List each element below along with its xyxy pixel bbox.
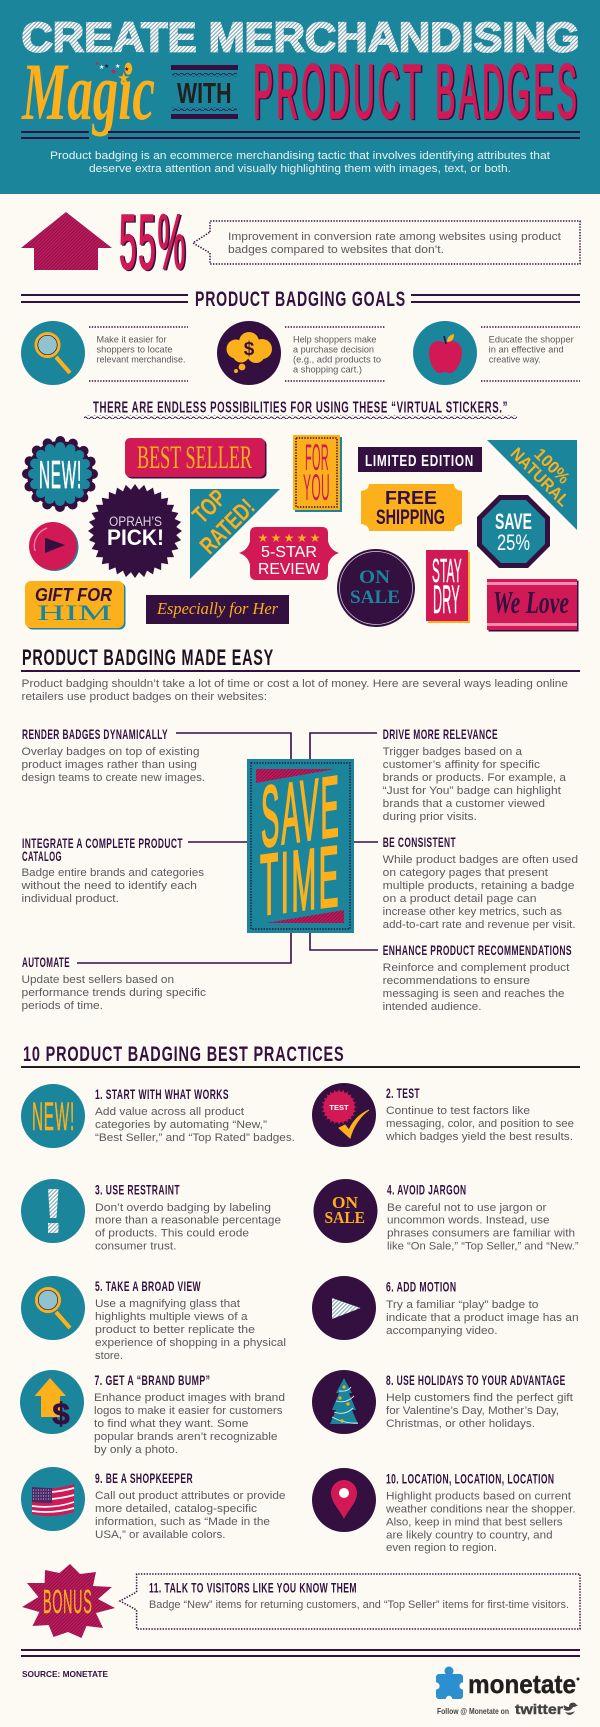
practice 8 — [312, 1370, 573, 1434]
title line 1: CREATE MERCHANDISING — [22, 14, 580, 60]
panel: 55% statistic: 55% — [120, 198, 188, 286]
icon: bonus starburst — [22, 1564, 115, 1638]
practice 1: “Best Seller,” and “Top Rated” badges. — [95, 1132, 295, 1144]
icon: exclamation — [21, 1179, 85, 1243]
item: integrate a complete product catalog — [20, 835, 205, 905]
icon: stars above Magic: ★ — [104, 63, 109, 70]
badge: BEST SELLER: BEST SELLER — [137, 440, 252, 476]
practice 3: more than a reasonable percentage — [95, 1214, 281, 1226]
practice 6: 6. ADD MOTION — [386, 1278, 456, 1294]
callout text — [228, 231, 561, 256]
badge: FREE SHIPPING — [361, 484, 462, 531]
badge: play — [29, 522, 78, 571]
goal 3 text: creative way. — [489, 354, 541, 364]
item: enhance product recommendations — [383, 942, 572, 1013]
practice 10: are likely country to country, and — [386, 1530, 553, 1542]
item: enhance product recommendations: recommendations to ensure — [383, 975, 530, 987]
badge: ON SALE: ON — [359, 567, 390, 588]
badge: FREE SHIPPING: FREE — [385, 487, 437, 508]
badge: Oprah's Pick: PICK! — [107, 525, 164, 550]
item: render badges dynamically: Overlay badges on top of existing — [22, 746, 200, 758]
practice 4: like “On Sale,” “Top Seller,” and “New.” — [387, 1240, 579, 1252]
panel: best practices — [20, 1043, 580, 1554]
practice 10 — [312, 1468, 576, 1554]
practice 3: consumer trust. — [95, 1240, 176, 1252]
bonus text: 11. TALK TO VISITORS LIKE YOU KNOW THEM — [149, 1580, 357, 1596]
icon: location pin — [312, 1468, 376, 1532]
monetate logo — [432, 1666, 580, 1717]
practice 8: for Valentine’s Day, Mother’s Day, — [386, 1405, 559, 1417]
practice 1: Add value across all product — [95, 1106, 244, 1118]
big number — [119, 198, 188, 286]
icon: play — [312, 1276, 376, 1340]
icon: ON SALE: ON — [332, 1193, 358, 1212]
practice 5: highlights multiple views of a — [95, 1311, 248, 1323]
badge: We Love — [487, 579, 578, 632]
practice 5: experience of shopping in a physical — [95, 1337, 286, 1349]
practice 9: USA,” or available colors. — [95, 1529, 226, 1541]
practice 3: 3. USE RESTRAINT — [95, 1182, 180, 1198]
practice 4: phrases consumers are familiar with — [387, 1228, 575, 1240]
practice 10: Also, keep in mind that best sellers — [386, 1516, 563, 1528]
intro text: Product badging is an ecommerce merchandising tactic that involves identifying attributes that — [50, 150, 550, 162]
practice 7: 7. GET A “BRAND BUMP” — [94, 1372, 210, 1388]
bonus text: Badge “New” items for returning customers, and “Top Seller” items for first-time visitors. — [149, 1599, 569, 1611]
panel: sticker badges: FOR — [305, 437, 329, 478]
icon: flag — [21, 1467, 85, 1531]
panel: product badging goals — [21, 288, 580, 419]
badge: 5-star review: ★ — [258, 531, 268, 545]
icon: thought cloud: $ — [244, 339, 255, 360]
panel: product badging made easy: SAVE — [261, 758, 341, 866]
title word: Magic: Magic — [21, 46, 155, 137]
practice 6: Try a familiar “play” badge to — [386, 1299, 538, 1311]
badge: BEST SELLER — [125, 438, 266, 478]
item: drive more relevance: DRIVE MORE RELEVANCE — [383, 726, 498, 742]
badge: GIFT FOR HIM: HIM — [37, 600, 112, 625]
badge: Especially for Her: Especially for Her — [156, 599, 278, 618]
practice 6: indicate that a product image has an — [386, 1312, 579, 1324]
practice 7 — [20, 1370, 285, 1456]
practice 7: to find what they want. Some — [94, 1418, 248, 1430]
goal 2 — [217, 321, 385, 385]
badge: NEW! — [27, 441, 93, 507]
item: render badges dynamically: product images rather than using — [22, 759, 197, 771]
icon: up arrow with dollar — [20, 1370, 84, 1434]
icon: magnifying glass — [21, 321, 85, 385]
badge: 5-star review — [239, 527, 339, 580]
item: automate: AUTOMATE — [22, 954, 70, 970]
practice 3: of products. This could erode — [95, 1228, 249, 1240]
heading: 10 PRODUCT BADGING BEST PRACTICES — [23, 1043, 344, 1066]
practice 7: popular brands aren’t recognizable — [94, 1431, 278, 1443]
WITH emblem: WITH — [177, 78, 232, 110]
item: drive more relevance: customer’s affinity for specific — [383, 759, 541, 771]
goal 2 text: Help shoppers make — [293, 334, 376, 344]
intro paragraph: Product badging shouldn’t take a lot of time or cost a lot of money. Here are several ways leading online — [22, 678, 568, 690]
badge: FOR YOU — [293, 435, 342, 512]
goal 2 text: (e.g., add products to — [293, 354, 381, 364]
badge: 5-star review: ★ — [310, 531, 320, 545]
heading rules — [21, 295, 580, 302]
item: integrate a complete product catalog: individual product. — [22, 893, 119, 905]
icon: stars above Magic: ★ — [117, 70, 130, 87]
panel: header — [0, 0, 600, 194]
follow line: Follow @ Monetate on — [437, 1706, 509, 1716]
practice 1: categories by automating “New,” — [95, 1119, 267, 1131]
goal 2 text — [293, 334, 381, 374]
heading: PRODUCT BADGING GOALS — [195, 288, 406, 311]
item: be consistent: multiple products, retaining a badge — [383, 880, 574, 892]
panel: 55% statistic: 55% — [119, 198, 187, 286]
practice 7: by only a photo. — [94, 1444, 178, 1456]
item: enhance product recommendations: Reinforce and complement product — [383, 962, 570, 974]
panel: sticker badges — [25, 435, 578, 632]
badge: ON SALE: SALE — [350, 587, 400, 608]
icon: twitter bird — [563, 1703, 578, 1715]
badge: 100% NATURAL — [487, 440, 577, 530]
badge: 5-star review: 5-STAR — [261, 544, 317, 561]
practice 2 — [312, 1083, 574, 1147]
panel: 55% statistic — [21, 198, 580, 286]
item: enhance product recommendations: intended audience. — [383, 1001, 482, 1013]
icon: test check: TEST — [329, 1103, 349, 1112]
callout box — [120, 1574, 580, 1629]
panel: sticker badges: DRY — [433, 578, 460, 622]
practice 8: Christmas, or other holidays. — [386, 1418, 535, 1430]
badge: TOP RATED: RATED! — [195, 494, 261, 560]
intro paragraph — [22, 678, 568, 703]
practice 5: store. — [95, 1350, 123, 1362]
twitter wordmark: twitter — [515, 1701, 564, 1717]
badge: TOP RATED: TOP — [187, 484, 232, 529]
double rule — [21, 132, 580, 138]
practice 2: 2. TEST — [386, 1085, 420, 1101]
badge: Oprah's Pick — [88, 484, 182, 578]
panel: sticker badges: YOU — [303, 467, 330, 508]
practice 7: Enhance product images with brand — [94, 1392, 285, 1404]
icon: stars above Magic: ★ — [110, 67, 117, 76]
badge: Oprah's Pick: OPRAH’S — [109, 514, 162, 529]
item: automate: Update best sellers based on — [22, 974, 174, 986]
goal 1 text — [96, 334, 186, 364]
badge: GIFT FOR HIM: GIFT FOR — [35, 584, 113, 605]
practice 5: product to better replicate the — [95, 1324, 255, 1336]
connector lines — [77, 733, 378, 963]
intro paragraph: retailers use product badges on their websites: — [22, 691, 267, 703]
practice 2: which badges yield the best results. — [385, 1131, 573, 1143]
footer rule — [21, 1650, 580, 1656]
item: drive more relevance: during prior visits. — [383, 811, 477, 823]
icon: magnifying glass — [21, 1276, 85, 1340]
panel: bonus — [22, 1564, 580, 1638]
icon: up arrow — [21, 212, 112, 270]
icon: apple — [413, 321, 477, 385]
item: drive more relevance — [383, 726, 566, 823]
panel: sticker badges: NEW! — [39, 454, 82, 497]
icon: holiday tree — [312, 1370, 376, 1434]
intro text — [50, 150, 550, 175]
item: automate: performance trends during specific — [22, 987, 207, 999]
badge: LIMITED EDITION: LIMITED EDITION — [365, 453, 474, 470]
item: drive more relevance: brands or products. For example, a — [383, 772, 566, 784]
heading: PRODUCT BADGING MADE EASY — [22, 645, 274, 670]
Save Time badge — [247, 758, 354, 934]
item: drive more relevance: Trigger badges based on a — [383, 746, 522, 758]
item: be consistent: BE CONSISTENT — [383, 834, 456, 850]
badge: 100% NATURAL: NATURAL — [507, 444, 573, 510]
practice 2: messaging, color, and position to see — [386, 1118, 574, 1130]
badge: 5-star review: REVIEW — [258, 561, 321, 578]
intro text: deserve extra attention and visually highlighting them with images, text, or both. — [89, 163, 511, 175]
practice 3 — [21, 1179, 281, 1252]
item: automate: periods of time. — [22, 1000, 103, 1012]
practice 9: 9. BE A SHOPKEEPER — [95, 1470, 193, 1486]
practice 6: accompanying video. — [386, 1325, 498, 1337]
badge: ON SALE — [337, 549, 415, 627]
callout box — [193, 221, 580, 264]
item: be consistent — [383, 834, 578, 931]
goal 1 — [21, 321, 188, 385]
icon: thought cloud — [217, 321, 281, 385]
practice 5 — [21, 1276, 286, 1362]
item: integrate a complete product catalog: without the need to identify each — [20, 880, 197, 892]
item: render badges dynamically: design teams to create new images. — [22, 772, 205, 784]
item: drive more relevance: brands that a customer viewed — [383, 798, 545, 810]
panel: product badging made easy — [20, 645, 580, 1013]
goal 2 text: a shopping cart.) — [293, 364, 362, 374]
bonus text — [149, 1580, 569, 1611]
icon: up arrow with dollar: $ — [52, 1396, 70, 1431]
icon: stars above Magic: ★ — [124, 66, 129, 73]
icon: stars above Magic: ★ — [95, 61, 100, 67]
item: be consistent: While product badges are often used — [383, 854, 578, 866]
wordmark: monetate — [468, 1669, 576, 1699]
item: render badges dynamically — [22, 726, 205, 784]
item: automate — [22, 954, 207, 1012]
practice 4: uncommon words. Instead, use — [387, 1214, 550, 1226]
practice 9: Call out product attributes or provide — [95, 1490, 286, 1502]
badge: LIMITED EDITION — [358, 447, 482, 472]
item: drive more relevance: “Just for You” badge can highlight — [383, 785, 561, 797]
icon: puzzle piece — [432, 1666, 467, 1702]
panel: sticker badges: STAY — [432, 552, 462, 589]
badge: 5-star review: ★ — [271, 531, 281, 545]
icon: stars above Magic — [95, 61, 130, 87]
badge: TOP RATED — [187, 484, 280, 579]
badge: SAVE 25%: 25% — [497, 530, 530, 555]
practice 9: more detailed, catalog-specific — [95, 1503, 258, 1515]
practice 1: NEW! — [32, 1095, 75, 1139]
item: be consistent: on a product detail page can — [383, 893, 536, 905]
practice 10: weather conditions near the shopper. — [385, 1504, 576, 1516]
practice 1: 1. START WITH WHAT WORKS — [95, 1086, 229, 1102]
goal 3 text: in an effective and — [489, 344, 564, 354]
badge: 100% NATURAL: 100% — [530, 445, 573, 488]
icon: test check — [312, 1083, 376, 1147]
item: render badges dynamically: RENDER BADGES DYNAMICALLY — [22, 726, 168, 742]
icon: stars above Magic: ★ — [115, 63, 120, 70]
practice 3: Don’t overdo badging by labeling — [95, 1202, 271, 1214]
callout text: Improvement in conversion rate among websites using product — [228, 231, 561, 243]
item: be consistent: add-to-cart rate and revenue per visit. — [383, 919, 576, 931]
practice 10: Highlight products based on current — [386, 1490, 571, 1502]
practice 9 — [21, 1467, 286, 1541]
practice 8: Help customers find the perfect gift — [386, 1392, 573, 1404]
item: integrate a complete product catalog: INTEGRATE A COMPLETE PRODUCT — [22, 835, 183, 851]
practice 2: Continue to test factors like — [386, 1105, 530, 1117]
practice 4 — [314, 1179, 579, 1252]
badge: Especially for Her — [146, 595, 289, 624]
goal 1 text: shoppers to locate — [96, 344, 172, 354]
goal 2 text: a purchase decision — [293, 344, 374, 354]
callout text: badges compared to websites that don’t. — [228, 244, 444, 256]
goal 1 text: Make it easier for — [96, 334, 166, 344]
practice 1 — [21, 1084, 295, 1148]
badge: STAY DRY — [426, 550, 470, 623]
icon: ON SALE — [314, 1179, 378, 1243]
item: enhance product recommendations: messaging is seen and reaches the — [383, 988, 564, 1000]
goal 3 text — [489, 334, 574, 364]
source: SOURCE: MONETATE — [22, 1669, 108, 1679]
practice 4: Be careful not to use jargon or — [387, 1202, 547, 1214]
icon: ON SALE: SALE — [324, 1208, 365, 1227]
goal 3 text: Educate the shopper — [489, 334, 574, 344]
panel: product badging made easy: TIME — [260, 828, 341, 934]
badge: GIFT FOR HIM — [25, 581, 126, 630]
practice 4: 4. AVOID JARGON — [387, 1182, 466, 1198]
item: be consistent: increase other key metrics, such as — [383, 906, 563, 918]
badge: 5-star review: ★ — [297, 531, 307, 545]
item: integrate a complete product catalog: Badge entire brands and categories — [22, 867, 205, 879]
badge: FREE SHIPPING: SHIPPING — [376, 506, 445, 529]
item: be consistent: on category pages that present — [383, 867, 548, 879]
icon: NEW — [21, 1084, 85, 1148]
goal 3 — [413, 321, 580, 385]
practice 10: even region to region. — [386, 1542, 497, 1554]
practice 9: information, such as “Made in the — [95, 1516, 270, 1528]
WITH emblem — [171, 65, 238, 119]
goal 1 text: relevant merchandise. — [96, 354, 186, 364]
badge: 5-star review: ★ — [284, 531, 294, 545]
practice 6 — [312, 1276, 579, 1340]
badge: SAVE 25%: SAVE — [495, 509, 532, 534]
item: integrate a complete product catalog: CATALOG — [22, 848, 62, 864]
badge: SAVE 25% — [477, 495, 550, 568]
icon: bonus starburst: BONUS — [43, 1583, 93, 1620]
practice 5: 5. TAKE A BROAD VIEW — [95, 1278, 201, 1294]
practice 5: Use a magnifying glass that — [95, 1298, 240, 1310]
practice 7: logos to make it easier for customers — [94, 1405, 283, 1417]
icon: stars above Magic: ★ — [99, 64, 104, 71]
